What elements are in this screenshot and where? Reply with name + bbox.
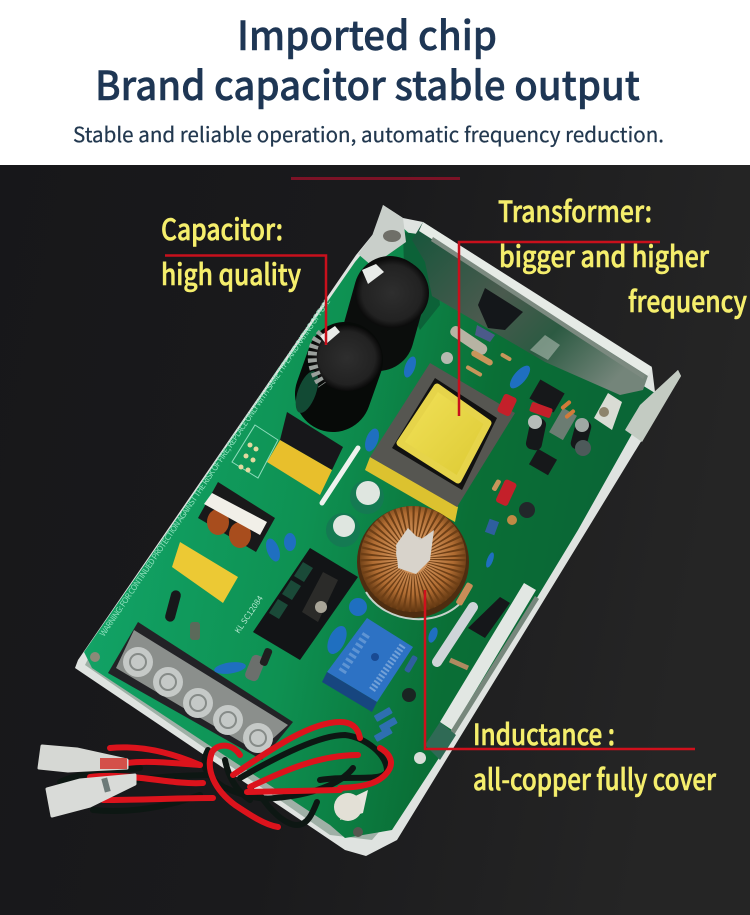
transformer leader line bbox=[459, 242, 660, 416]
inductance label bbox=[473, 712, 716, 799]
power supply board bbox=[39, 205, 681, 856]
inductance leader line bbox=[425, 590, 695, 749]
jumper pads bbox=[232, 425, 278, 478]
transformer bbox=[365, 363, 515, 522]
small yellow and black filter capacitor bbox=[267, 412, 343, 495]
upper connector red crimp bbox=[100, 758, 127, 769]
silkscreen warning text: WARNING: FOR CONTINUED PROTECTION AGAINST THE RISK OF FIRE, REPLACE ONLY WITH SAME TYPE AND RATING OF FUSE bbox=[97, 297, 333, 639]
transformer label: Transformer: bbox=[498, 189, 652, 231]
transformer label bbox=[498, 189, 747, 321]
copper toroid inductor bbox=[357, 506, 469, 618]
black heat sink bbox=[253, 548, 358, 660]
chassis shaded lower edge bbox=[85, 655, 385, 840]
title: Imported chip bbox=[237, 4, 497, 62]
inductor base ring bbox=[366, 592, 465, 619]
small components bbox=[90, 324, 593, 821]
callout: transformer bbox=[459, 189, 747, 416]
callout: capacitor bbox=[161, 207, 326, 345]
inductance label: Inductance : bbox=[473, 712, 615, 754]
lower yellow capacitor bbox=[172, 542, 238, 603]
terminal block bbox=[108, 622, 293, 760]
title: Brand capacitor stable output bbox=[95, 54, 640, 112]
upper crimp connector bbox=[39, 746, 127, 771]
heat sink wall bbox=[412, 222, 652, 395]
bottom mounting hole bbox=[353, 827, 363, 837]
right bolt tab bbox=[594, 393, 622, 430]
page header background bbox=[0, 0, 750, 165]
decorative top red rule bbox=[291, 177, 460, 180]
silkscreen model text: KL SC12084 bbox=[232, 593, 266, 636]
common mode choke bbox=[198, 482, 275, 552]
metal chassis bbox=[75, 205, 681, 856]
front capacitor bbox=[291, 325, 382, 416]
subtitle: Stable and reliable operation, automatic frequency reduction. bbox=[73, 118, 664, 148]
blue relay bbox=[322, 618, 413, 712]
top left mounting tab bbox=[358, 205, 406, 266]
callout: inductance bbox=[425, 590, 716, 799]
lower connector dark crimp bbox=[101, 777, 111, 793]
red wires bbox=[90, 722, 391, 827]
green circuit board bbox=[84, 225, 655, 838]
white glue strip bbox=[322, 448, 358, 503]
capacitor leader line bbox=[165, 256, 326, 345]
capacitor label: high quality bbox=[161, 252, 301, 294]
capacitor label bbox=[161, 207, 301, 294]
dark green upper board bbox=[403, 232, 440, 330]
transformer label: bigger and higher bbox=[499, 234, 709, 276]
black wires bbox=[60, 735, 387, 825]
right bracket bbox=[625, 370, 681, 442]
wiring harness bbox=[60, 722, 391, 827]
capacitor label: Capacitor: bbox=[161, 207, 283, 249]
rear capacitor bbox=[355, 258, 429, 335]
title bbox=[95, 4, 640, 112]
lower crimp connector bbox=[47, 775, 135, 816]
